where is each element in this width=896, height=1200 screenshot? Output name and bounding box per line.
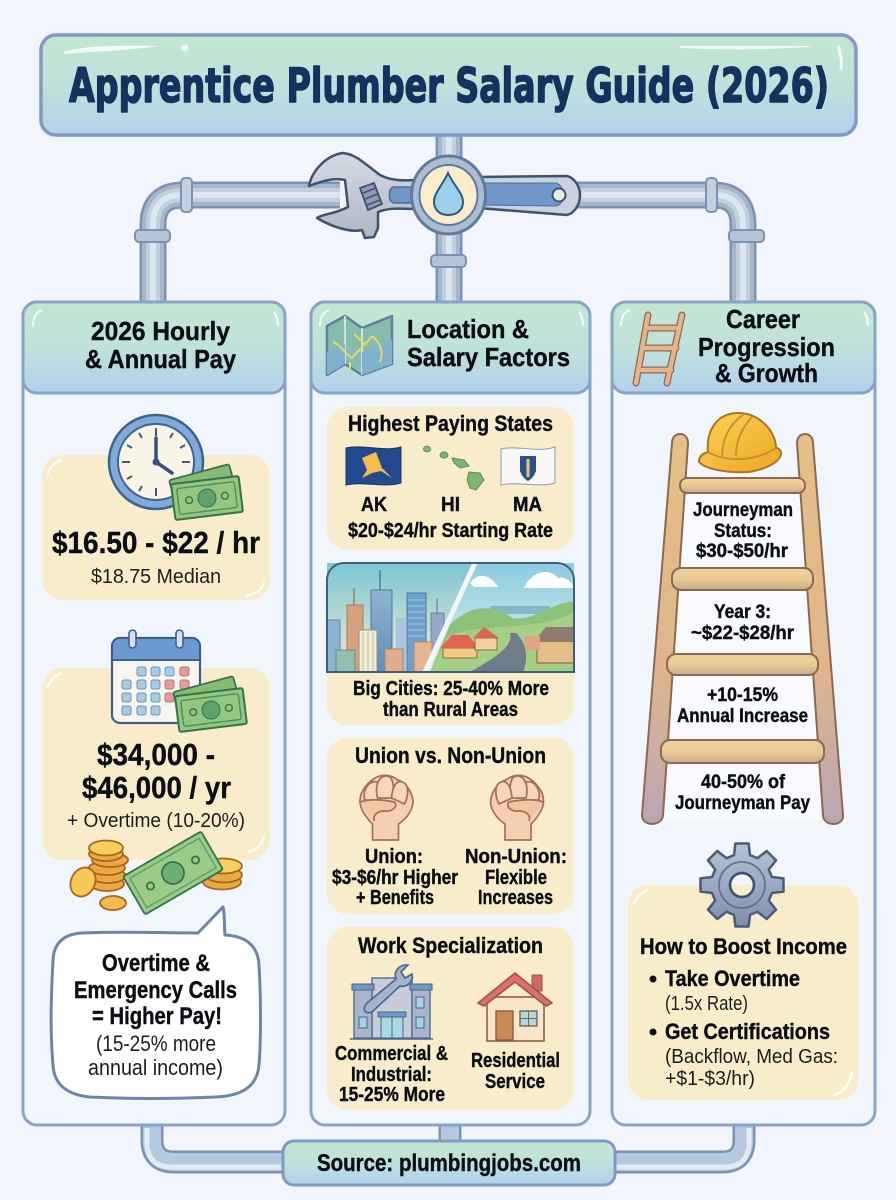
card: work specialization: Residential xyxy=(471,1050,560,1072)
ladder chart: career steps: 40-50% of xyxy=(701,772,786,793)
panel header: career: Progression xyxy=(698,332,835,362)
ladder chart: career steps: ~$22-$28/hr xyxy=(691,623,795,644)
icon: hard hat xyxy=(699,413,781,472)
icon: water drop xyxy=(434,173,463,215)
callout: overtime speech bubble: Emergency Calls xyxy=(74,977,237,1004)
card: union versus non-union: + Benefits xyxy=(356,887,434,909)
card: big cities versus rural: Big Cities: 25-40% More xyxy=(353,678,549,700)
list: income tips: (Backflow, Med Gas: xyxy=(665,1046,838,1068)
ladder chart: career steps: +10-15% xyxy=(707,685,778,706)
list: income tips: (1.5x Rate) xyxy=(665,993,748,1015)
panel header: pay: & Annual Pay xyxy=(85,344,236,374)
list: income tips: +$1-$3/hr) xyxy=(665,1068,755,1090)
icon: calendar xyxy=(112,630,200,723)
panel: hourly and annual pay xyxy=(23,302,285,1125)
panel header: career: Career xyxy=(726,304,800,334)
icon: union fist xyxy=(360,775,413,840)
ladder chart: career steps: Year 3: xyxy=(714,602,771,623)
pipe network: bottom xyxy=(147,1122,749,1167)
card: annual salary xyxy=(42,630,270,860)
card: highest paying states: MA xyxy=(513,494,542,516)
panel header: location: Salary Factors xyxy=(407,342,570,372)
source footer: Source: plumbingjobs.com xyxy=(317,1150,581,1177)
card: annual salary: $34,000 - xyxy=(97,737,215,772)
icon: non-union fist xyxy=(490,775,544,840)
ladder chart: career steps: Annual Increase xyxy=(677,706,808,727)
card: union versus non-union xyxy=(327,738,574,914)
ladder chart: career steps xyxy=(642,413,843,824)
panel header: location xyxy=(311,302,590,393)
callout: overtime speech bubble: (15-25% more xyxy=(96,1031,216,1056)
icon: map xyxy=(327,316,392,375)
panel: location and salary factors xyxy=(311,302,590,1125)
ladder chart: career steps: Journeyman xyxy=(693,500,793,521)
card: union versus non-union: Non-Union: xyxy=(465,846,567,868)
card: highest paying states: AK xyxy=(361,494,387,516)
panel header: pay xyxy=(23,302,285,393)
icon: cash xyxy=(168,463,243,520)
card: hourly rate: $16.50 - $22 / hr xyxy=(52,525,260,560)
ladder chart: career steps: $30-$50/hr xyxy=(696,541,789,562)
callout: overtime speech bubble: annual income) xyxy=(88,1055,223,1080)
icon: commercial building with wrench xyxy=(350,965,433,1039)
icon: coins and cash xyxy=(66,831,242,915)
card: work specialization: Work Specialization xyxy=(358,933,543,958)
illustration: city and countryside xyxy=(327,563,575,672)
icon: house xyxy=(478,973,552,1041)
panel header: location: Location & xyxy=(407,314,529,344)
card: highest paying states: Highest Paying States xyxy=(348,411,553,436)
ladder rails and rungs xyxy=(642,434,843,824)
ladder chart: career steps: Journeyman Pay xyxy=(675,793,810,814)
card: work specialization xyxy=(327,927,574,1110)
list: income tips: Take Overtime xyxy=(665,966,800,991)
icon: cash xyxy=(172,675,247,732)
card: hourly rate: $18.75 Median xyxy=(91,566,221,588)
card: union versus non-union: Union: xyxy=(365,846,423,868)
card: big cities versus rural: than Rural Areas xyxy=(383,699,518,721)
card: union versus non-union: Increases xyxy=(478,887,553,909)
callout: overtime speech bubble: Overtime & xyxy=(102,950,210,977)
card: work specialization: Commercial & xyxy=(335,1043,448,1065)
icon: clock xyxy=(109,415,203,509)
card: how to boost income: How to Boost Income xyxy=(640,934,847,959)
panel header: career xyxy=(612,302,875,393)
icon: small ladder xyxy=(636,315,682,383)
card: annual salary: $46,000 / yr xyxy=(82,770,231,805)
icon: Alaska flag xyxy=(346,447,401,485)
list: income tips: Get Certifications xyxy=(665,1019,830,1044)
callout: overtime speech bubble xyxy=(51,907,260,1098)
callout: overtime speech bubble: = Higher Pay! xyxy=(92,1003,222,1030)
card: union versus non-union: Flexible xyxy=(485,867,547,889)
card: how to boost income xyxy=(628,844,858,1100)
ladder chart: career steps: Status: xyxy=(714,521,772,542)
card: work specialization: Industrial: xyxy=(351,1064,432,1086)
icon: wrench and water drop hub xyxy=(309,153,580,238)
card: highest paying states: HI xyxy=(441,494,460,516)
card: work specialization: 15-25% More xyxy=(339,1084,445,1106)
list: income tips xyxy=(650,966,838,1090)
panel header: career: & Growth xyxy=(715,358,818,388)
panel: career progression and growth xyxy=(612,302,875,1125)
title banner xyxy=(41,35,856,135)
icon: Hawaii islands xyxy=(424,446,484,490)
card: highest paying states xyxy=(327,407,574,550)
card: union versus non-union: Union vs. Non-Union xyxy=(355,743,546,768)
card: annual salary: + Overtime (10-20%) xyxy=(67,810,245,832)
card: highest paying states: $20-$24/hr Starting Rate xyxy=(348,520,553,542)
panel header: pay: 2026 Hourly xyxy=(91,316,231,346)
card: big cities versus rural xyxy=(327,563,575,725)
icon: Massachusetts flag xyxy=(501,447,555,485)
pipe network: top xyxy=(135,135,764,302)
card: hourly rate xyxy=(42,415,270,600)
card: work specialization: Service xyxy=(485,1071,545,1093)
icon: gear xyxy=(700,844,784,926)
card: union versus non-union: $3-$6/hr Higher xyxy=(332,867,458,889)
source footer xyxy=(283,1141,615,1185)
